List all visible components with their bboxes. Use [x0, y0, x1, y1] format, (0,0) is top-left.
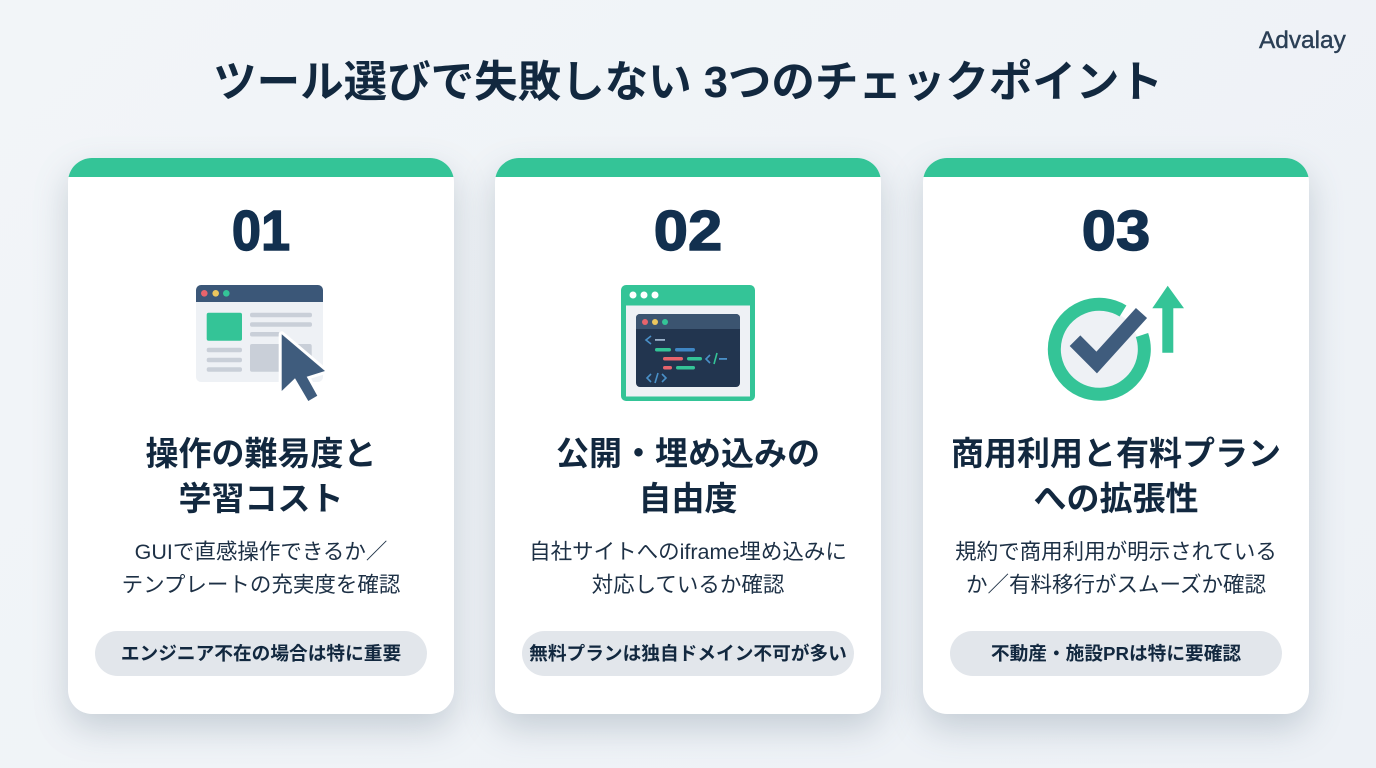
accent bar [495, 158, 881, 177]
heading: 操作の難易度と [146, 435, 376, 472]
heading: 自由度 [638, 480, 738, 517]
description: か／有料移行がスムーズか確認 [966, 573, 1266, 597]
accent bar [68, 158, 454, 177]
description: GUIで直感操作できるか／ [135, 540, 387, 564]
note pill [95, 631, 427, 676]
note pill [950, 631, 1282, 676]
title: ツール選びで失敗しない 3つのチェックポイント [213, 59, 1163, 107]
icon: code editor window [621, 285, 755, 401]
number 03: 03 [1082, 199, 1150, 263]
description: テンプレートの充実度を確認 [122, 573, 400, 597]
number 02: 02 [654, 199, 722, 263]
description: 自社サイトへのiframe埋め込みに [529, 540, 847, 564]
panel: checkpoint 02 [495, 158, 881, 714]
heading [951, 435, 1281, 517]
brand logo: Advalay [1259, 27, 1346, 54]
icon: browser window with cursor [196, 285, 325, 401]
description: 対応しているか確認 [592, 573, 784, 597]
note pill: 無料プランは独自ドメイン不可が多い [529, 643, 847, 664]
note pill: 不動産・施設PRは特に要確認 [991, 643, 1241, 664]
number 01: 01 [232, 199, 290, 263]
heading: 商用利用と有料プラン [951, 435, 1281, 472]
heading: 公開・埋め込みの [556, 435, 820, 472]
description [122, 540, 400, 597]
panel: checkpoint 01 [68, 158, 454, 714]
description [955, 540, 1277, 597]
panel: checkpoint 03 [923, 158, 1309, 714]
note pill [522, 631, 854, 676]
heading: への拡張性 [1034, 480, 1198, 517]
accent bar [923, 158, 1309, 177]
description: 規約で商用利用が明示されている [955, 540, 1277, 564]
icon: check mark with up arrow [1048, 286, 1184, 401]
heading [146, 435, 376, 517]
note pill: エンジニア不在の場合は特に重要 [121, 643, 401, 664]
description [529, 540, 847, 597]
heading [556, 435, 820, 517]
heading: 学習コスト [178, 480, 344, 517]
